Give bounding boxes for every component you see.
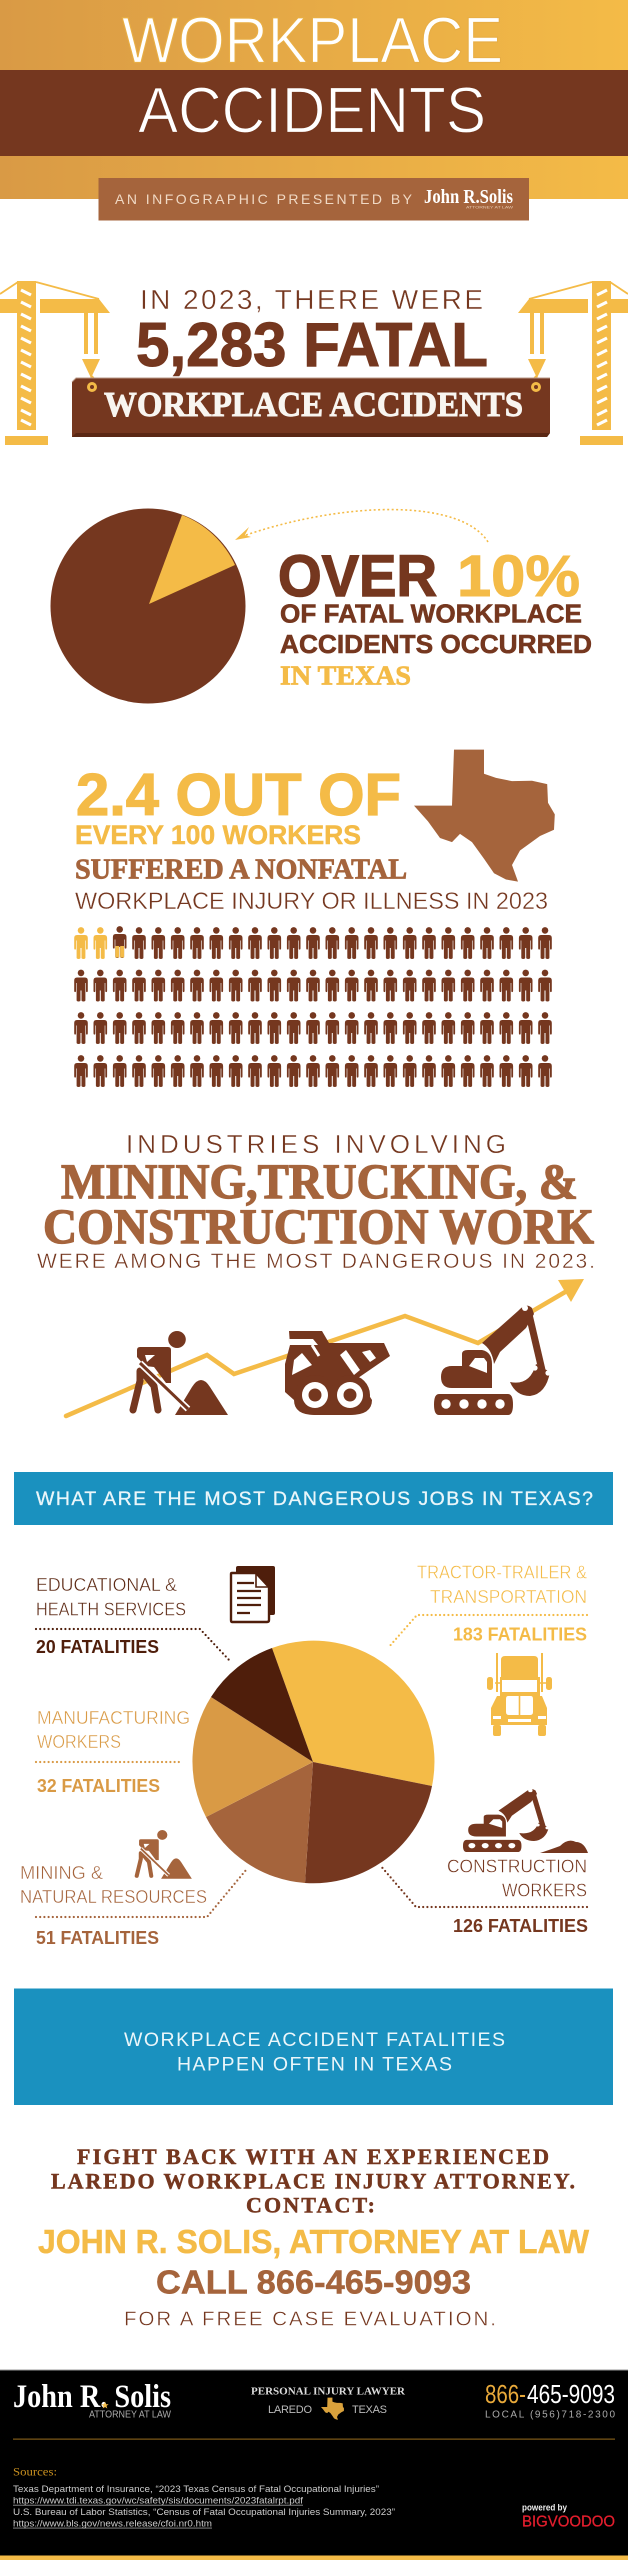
banner: fatalities happen often: WORKPLACE ACCIDENT FATALITIES (124, 2029, 505, 2051)
sources: U.S. Bureau of Labor Statistics, “Census of Fatal Occupational Injuries Summary, 2023” (13, 2507, 395, 2518)
sources (13, 2465, 395, 2530)
label: educational and health services: EDUCATIONAL & (36, 1575, 177, 1595)
footer logo: John R. Solis (13, 2379, 171, 2415)
label: mining and natural resources: MINING & (20, 1863, 103, 1883)
pie chart: Texas share (50, 508, 246, 704)
banner: most dangerous jobs (14, 1472, 613, 1525)
banner: most dangerous jobs: WHAT ARE THE MOST DANGEROUS JOBS IN TEXAS? (36, 1488, 593, 1510)
arrow: dotted pointer to wedge (235, 510, 488, 542)
label: manufacturing workers: WORKERS (37, 1732, 121, 1752)
label: manufacturing workers (36, 1708, 190, 1796)
label: educational and health services: 20 FATALITIES (36, 1637, 159, 1657)
icon: small Texas (321, 2398, 344, 2420)
text: over 10 percent: IN TEXAS (280, 659, 411, 690)
icon: small worker (137, 1830, 192, 1879)
powered by: powered by (522, 2503, 568, 2514)
text: over 10 percent: OVER (278, 544, 437, 609)
hanging sign (72, 378, 550, 437)
label: tractor-trailer and transportation (388, 1563, 587, 1648)
icon: dump truck (285, 1331, 390, 1415)
footer phone: LOCAL (956)718-2300 (485, 2410, 615, 2421)
icon: excavator (434, 1305, 551, 1415)
fatal accidents headline (72, 284, 550, 437)
text: 2.4 out of 100: SUFFERED A NONFATAL (75, 855, 407, 886)
text: over 10 percent: 10% (457, 544, 580, 609)
call to action (38, 2144, 590, 2331)
banner: fatalities happen often: HAPPEN OFTEN IN TEXAS (177, 2053, 452, 2075)
footer tagline: TEXAS (352, 2404, 387, 2416)
label: construction workers: WORKERS (502, 1881, 587, 1901)
fatal accidents headline: IN 2023, THERE WERE (140, 284, 483, 315)
icon: document (231, 1566, 275, 1622)
pictogram: 100 workers (74, 926, 552, 1087)
text: over 10 percent: ACCIDENTS OCCURRED (280, 631, 592, 659)
presented by box: ATTORNEY AT LAW (466, 204, 513, 210)
label: mining and natural resources: NATURAL RESOURCES (20, 1887, 207, 1907)
footer phone (485, 2379, 615, 2421)
call to action: FOR A FREE CASE EVALUATION. (124, 2308, 496, 2331)
icon: truck front (487, 1653, 552, 1736)
sources: https://www.tdi.texas.gov/wc/safety/sis/documents/2023fatalrpt.pdf (13, 2496, 303, 2507)
powered by: BIGVOODOO (522, 2514, 615, 2531)
sources: Texas Department of Insurance, “2023 Texas Census of Fatal Occupational Injuries” (13, 2484, 379, 2495)
crane hooks (88, 384, 540, 390)
icon: right crane (518, 281, 628, 445)
presented by box (98, 178, 529, 220)
text: over 10 percent (278, 544, 592, 690)
call to action: LAREDO WORKPLACE INJURY ATTORNEY. (51, 2168, 575, 2194)
text: over 10 percent: OF FATAL WORKPLACE (280, 601, 582, 629)
heading: dangerous industries: CONSTRUCTION WORK (43, 1198, 594, 1254)
icon: worker with shovel (133, 1331, 228, 1415)
text: 2.4 out of 100: EVERY 100 WORKERS (75, 820, 361, 850)
text: 2.4 out of 100: WORKPLACE INJURY OR ILLNESS IN 2023 (75, 888, 548, 915)
icon: left crane (0, 281, 110, 445)
title (122, 4, 503, 147)
presented by box: John R.Solis (424, 186, 513, 208)
presented by box: AN INFOGRAPHIC PRESENTED BY (115, 191, 413, 207)
footer tagline: PERSONAL INJURY LAWYER (251, 2387, 405, 2398)
header banner (0, 0, 628, 220)
text: 2.4 out of 100: 2.4 OUT OF (76, 762, 401, 828)
label: manufacturing workers: 32 FATALITIES (37, 1776, 160, 1796)
label: tractor-trailer and transportation: TRANSPORTATION (430, 1587, 587, 1607)
call to action: FIGHT BACK WITH AN EXPERIENCED (77, 2144, 549, 2169)
label: tractor-trailer and transportation: TRACTOR-TRAILER & (417, 1563, 587, 1583)
heading: dangerous industries: INDUSTRIES INVOLVING (126, 1129, 506, 1159)
heading: dangerous industries (37, 1129, 595, 1273)
label: tractor-trailer and transportation: 183 FATALITIES (453, 1625, 587, 1645)
title: ACCIDENTS (138, 74, 486, 147)
text: 2.4 out of 100 (75, 762, 548, 915)
footer tagline (251, 2387, 405, 2420)
sources: https://www.bls.gov/news.release/cfoi.nr0.htm (13, 2519, 212, 2530)
footer (0, 2370, 628, 2560)
pie chart: fatalities by job (192, 1641, 434, 1883)
label: manufacturing workers: MANUFACTURING (37, 1708, 190, 1728)
footer phone: 866- (485, 2379, 526, 2409)
label: mining and natural resources: 51 FATALITIES (36, 1928, 159, 1948)
label: mining and natural resources (20, 1863, 246, 1948)
label: educational and health services: HEALTH SERVICES (36, 1600, 186, 1620)
powered by (522, 2503, 615, 2531)
chart: rising arrow (66, 1279, 584, 1416)
icon: small excavator and dirt pile (463, 1789, 588, 1853)
banner: fatalities happen often (14, 1988, 613, 2105)
icon: Texas map (414, 750, 555, 882)
label: construction workers (380, 1857, 588, 1936)
first row with highlighted workers (74, 926, 552, 959)
label: construction workers: 126 FATALITIES (453, 1916, 588, 1936)
fatal accidents headline: 5,283 FATAL (136, 311, 488, 380)
title: WORKPLACE (122, 4, 503, 77)
footer logo: ATTORNEY AT LAW (89, 2410, 171, 2421)
label: construction workers: CONSTRUCTION (447, 1857, 587, 1877)
sources: Sources: (13, 2465, 57, 2479)
heading: dangerous industries: MINING,TRUCKING, & (61, 1153, 578, 1209)
call to action: JOHN R. SOLIS, ATTORNEY AT LAW (38, 2223, 590, 2260)
hanging sign: WORKPLACE ACCIDENTS (104, 385, 523, 424)
footer tagline: LAREDO (268, 2404, 312, 2416)
label: educational and health services (36, 1575, 230, 1661)
call to action: CALL 866-465-9093 (156, 2264, 471, 2301)
call to action: CONTACT: (246, 2193, 375, 2218)
heading: dangerous industries: WERE AMONG THE MOST DANGEROUS IN 2023. (37, 1250, 595, 1273)
